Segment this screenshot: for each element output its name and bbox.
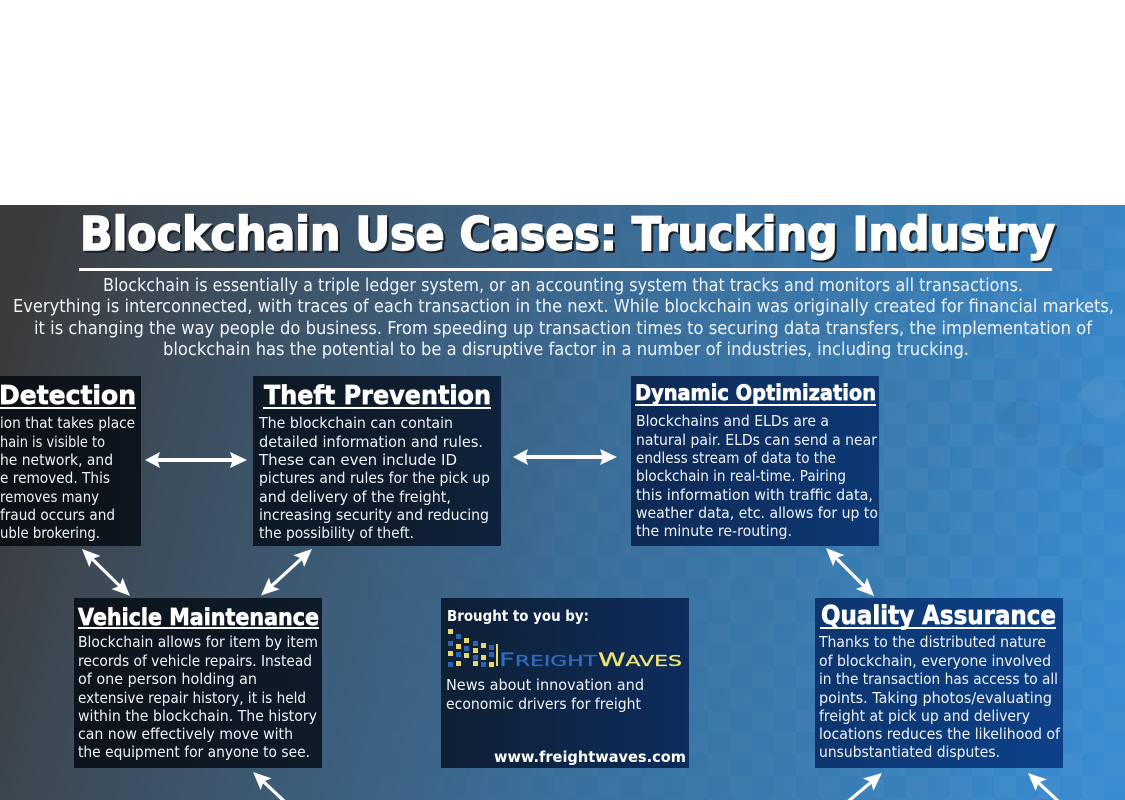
body text: quality assurance: unsubstantiated disputes.	[819, 743, 1000, 761]
panel: fraud detection	[0, 376, 141, 546]
body text: fraud detection: he network, and	[0, 451, 113, 469]
body text: dynamic optimization: blockchain in real-time. Pairing	[636, 467, 846, 485]
body text: vehicle maintenance: within the blockchain. The history	[78, 707, 317, 725]
body text: vehicle maintenance: can now effectively move with	[78, 725, 293, 743]
title: Blockchain Use Cases: Trucking Industry	[80, 207, 1055, 261]
panel: quality assurance	[815, 598, 1063, 768]
background panel	[0, 205, 1125, 800]
body text: dynamic optimization: weather data, etc. allows for up to	[636, 504, 878, 522]
sponsor description	[446, 676, 644, 713]
body text: theft prevention	[258, 414, 490, 542]
body text: fraud detection: hain is visible to	[0, 433, 105, 451]
arrow: detection to vehicle maintenance	[76, 543, 135, 602]
body text: vehicle maintenance: records of vehicle repairs. Instead	[78, 652, 312, 670]
body text: quality assurance: freight at pick up and delivery	[819, 707, 1030, 725]
body text: vehicle maintenance: Blockchain allows for item by item	[78, 633, 318, 651]
body text: vehicle maintenance: the equipment for anyone to see.	[78, 743, 310, 761]
body text: quality assurance: of blockchain, everyone involved	[819, 652, 1051, 670]
body text: quality assurance: Thanks to the distributed nature	[818, 633, 1046, 651]
intro paragraph	[13, 275, 1114, 360]
heading: quality assurance: Quality Assurance	[821, 601, 1056, 631]
body text: vehicle maintenance	[78, 633, 318, 761]
body text: dynamic optimization: the minute re-routing.	[636, 522, 792, 540]
body text: theft prevention: These can even include ID	[258, 451, 457, 469]
body text: quality assurance: locations reduces the likelihood of	[819, 725, 1061, 743]
body text: fraud detection: uble brokering.	[0, 524, 100, 542]
panel: brought to you by	[441, 598, 689, 768]
heading: detection: Detection	[0, 381, 136, 411]
body text: quality assurance: in the transaction has access to all	[819, 670, 1058, 688]
panel: vehicle maintenance	[74, 598, 322, 768]
body text: dynamic optimization: this information with traffic data,	[636, 486, 873, 504]
body text: theft prevention: and delivery of the freight,	[259, 488, 451, 506]
heading: dynamic optimization: Dynamic Optimization	[635, 381, 876, 405]
intro paragraph: Blockchain is essentially a triple ledger system, or an accounting system that tracks and monitors all transactions.	[103, 275, 1023, 296]
logo: freightwaves	[448, 629, 682, 671]
arrow: below quality assurance right	[1023, 767, 1077, 800]
arrow: detection to theft prevention	[145, 452, 247, 468]
arrow: theft prevention to dynamic optimization	[513, 449, 617, 465]
arrow: dynamic optimization to quality assurance	[820, 542, 880, 602]
heading: theft prevention: Theft Prevention	[264, 381, 491, 411]
body text: quality assurance: points. Taking photos/evaluating	[819, 689, 1052, 707]
body text: dynamic optimization: natural pair. ELDs can send a near	[636, 431, 878, 449]
panel: theft prevention	[253, 376, 501, 546]
heading: vehicle maintenance: Vehicle Maintenance	[78, 605, 319, 631]
body text: fraud detection: ion that takes place	[0, 414, 135, 432]
body text: theft prevention: detailed information and rules.	[259, 433, 483, 451]
arrow: below quality assurance left	[831, 767, 887, 800]
arrow: theft prevention to vehicle maintenance	[256, 543, 317, 601]
arrow: below vehicle maintenance	[248, 766, 302, 800]
body text: fraud detection: removes many	[0, 488, 99, 506]
sponsor description: News about innovation and	[446, 676, 644, 694]
title underline	[79, 268, 1052, 271]
body text: quality assurance	[818, 633, 1061, 761]
body text: vehicle maintenance: of one person holding an	[78, 670, 257, 688]
sponsor url: www.freightwaves.com	[494, 748, 686, 766]
logo: freightwaves: F REIGHT	[499, 649, 598, 671]
body text: dynamic optimization: endless stream of data to the	[636, 449, 836, 467]
sponsor heading: Brought to you by:	[447, 607, 589, 625]
panel: dynamic optimization	[631, 376, 879, 546]
body text: theft prevention: The blockchain can contain	[258, 414, 453, 432]
body text: theft prevention: the possibility of theft.	[259, 524, 414, 542]
intro paragraph: blockchain has the potential to be a disruptive factor in a number of industries, including trucking.	[163, 339, 969, 360]
body text: dynamic optimization: Blockchains and ELDs are a	[636, 412, 829, 430]
sponsor description: economic drivers for freight	[446, 695, 641, 713]
body text: fraud detection: e removed. This	[0, 469, 110, 487]
body text: fraud detection	[0, 414, 135, 542]
body text: theft prevention: increasing security and reducing	[259, 506, 489, 524]
body text: fraud detection: fraud occurs and	[0, 506, 115, 524]
logo: freightwaves: W AVES	[598, 649, 682, 671]
body text: vehicle maintenance: extensive repair history, it is held	[78, 689, 306, 707]
body text: theft prevention: pictures and rules for the pick up	[259, 469, 490, 487]
body text: dynamic optimization	[636, 412, 878, 540]
